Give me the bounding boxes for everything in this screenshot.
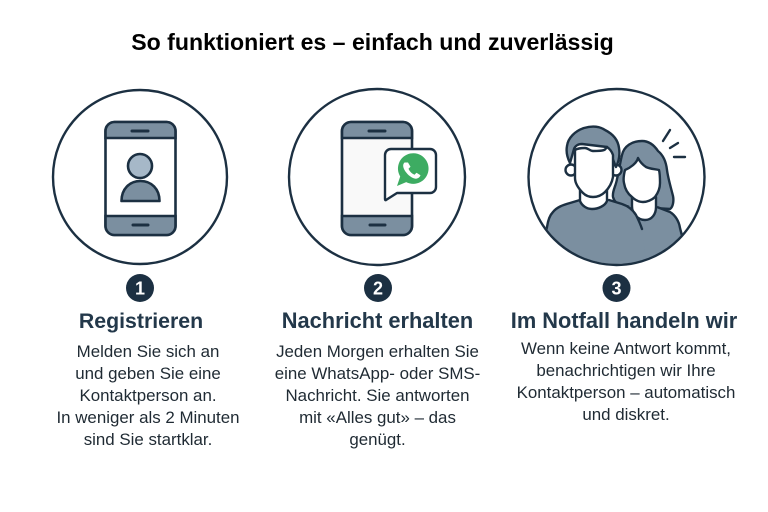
man neck — [580, 189, 607, 209]
man hair — [567, 127, 619, 167]
man shoulder outline — [546, 198, 644, 230]
man body fill — [546, 200, 644, 264]
woman body fill — [622, 205, 683, 264]
text: step 2: mit «Alles gut» – das — [299, 408, 456, 426]
text: step 3: Wenn keine Antwort kommt, — [521, 338, 731, 358]
icon: phone with contact — [53, 90, 227, 264]
step badge 2 — [364, 274, 392, 302]
text: step 3: Kontaktperson – automatisch — [517, 382, 735, 402]
text: step 2 — [275, 342, 480, 448]
man ears — [566, 164, 576, 176]
text: step 1: und geben Sie eine — [75, 364, 221, 382]
title: So funktioniert es – einfach und zuverlässig — [131, 29, 614, 55]
step badge 1: 1 — [135, 278, 145, 298]
text: step 2: eine WhatsApp- oder SMS- — [275, 364, 480, 382]
heading: step 2: Nachricht erhalten — [282, 308, 473, 333]
man face — [575, 147, 613, 197]
text: step 1 — [56, 342, 240, 448]
text: step 1: sind Sie startklar. — [84, 430, 212, 448]
heading: step 3: Im Notfall handeln wir — [511, 308, 737, 333]
step badge 3: 3 — [611, 278, 622, 298]
woman shoulder outline — [657, 207, 682, 236]
text: step 1: Melden Sie sich an — [77, 342, 219, 360]
icon: two people — [527, 88, 706, 266]
text: step 3: benachrichtigen wir Ihre — [536, 360, 716, 380]
heading: step 1: Registrieren — [79, 309, 203, 333]
text: step 3 — [517, 338, 735, 424]
text: step 1: In weniger als 2 Minuten — [56, 408, 240, 426]
woman neck — [632, 197, 656, 220]
step badge 3 — [602, 274, 630, 302]
icon: phone with WhatsApp bubble — [289, 89, 465, 265]
text: step 2: Nachricht. Sie antworten — [285, 386, 470, 404]
step badge 2: 2 — [373, 278, 383, 298]
text: step 2: genügt. — [349, 430, 406, 448]
text: step 3: und diskret. — [582, 404, 670, 424]
step badge 1 — [126, 274, 154, 302]
woman hair — [613, 141, 673, 209]
text: step 1: Kontaktperson an. — [79, 386, 217, 404]
text: step 2: Jeden Morgen erhalten Sie — [276, 342, 479, 360]
woman face — [624, 158, 660, 202]
